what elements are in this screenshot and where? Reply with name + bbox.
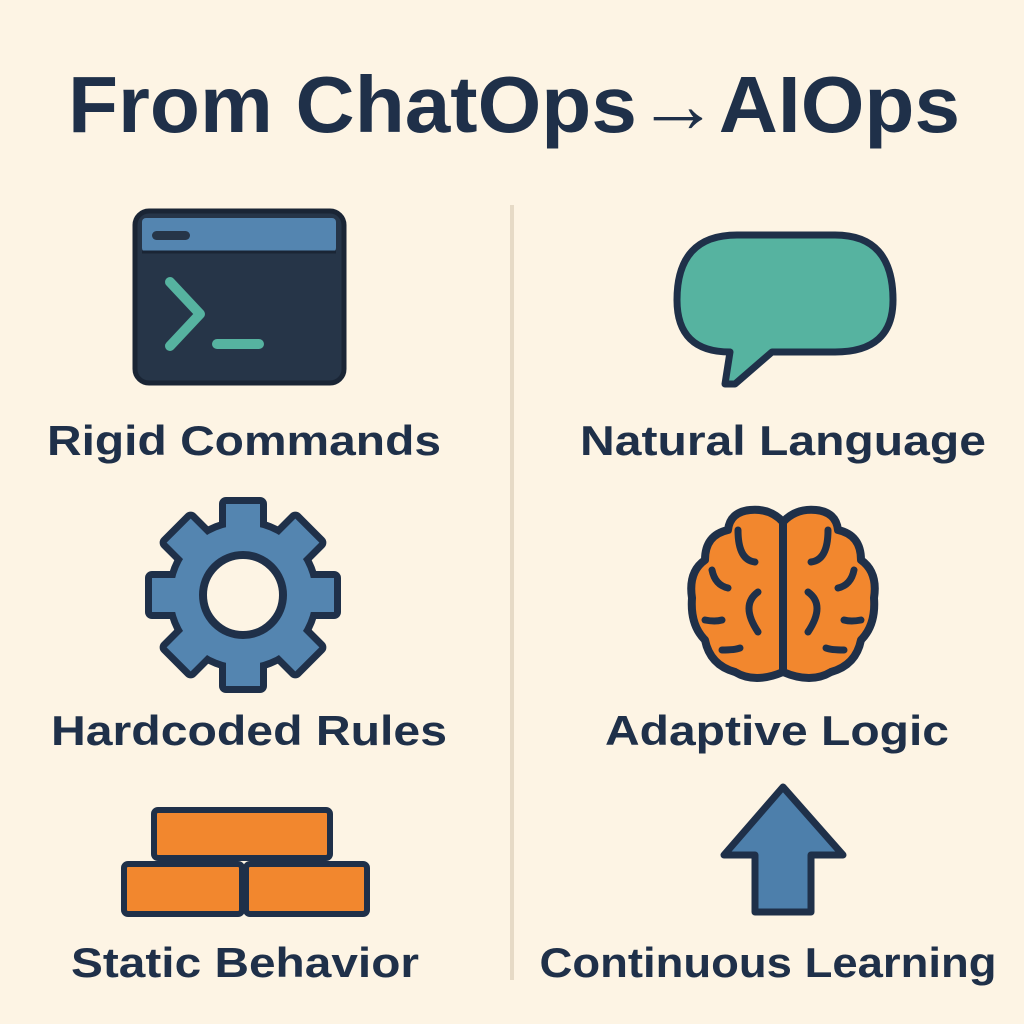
icon: gear xyxy=(152,504,334,686)
title: From ChatOps→AIOps xyxy=(68,60,960,149)
label: rigid commands: Rigid Commands xyxy=(47,417,441,464)
icon: speech bubble xyxy=(677,235,893,384)
label: static behavior: Static Behavior xyxy=(71,939,419,986)
icon: brain xyxy=(691,510,875,678)
label: adaptive logic: Adaptive Logic xyxy=(605,707,949,754)
icon: bricks xyxy=(124,810,367,914)
label: hardcoded rules: Hardcoded Rules xyxy=(51,707,447,754)
icon: terminal xyxy=(135,211,344,383)
label: continuous learning: Continuous Learning xyxy=(540,939,996,986)
icon: up arrow xyxy=(724,787,843,912)
label: natural language: Natural Language xyxy=(580,417,986,464)
